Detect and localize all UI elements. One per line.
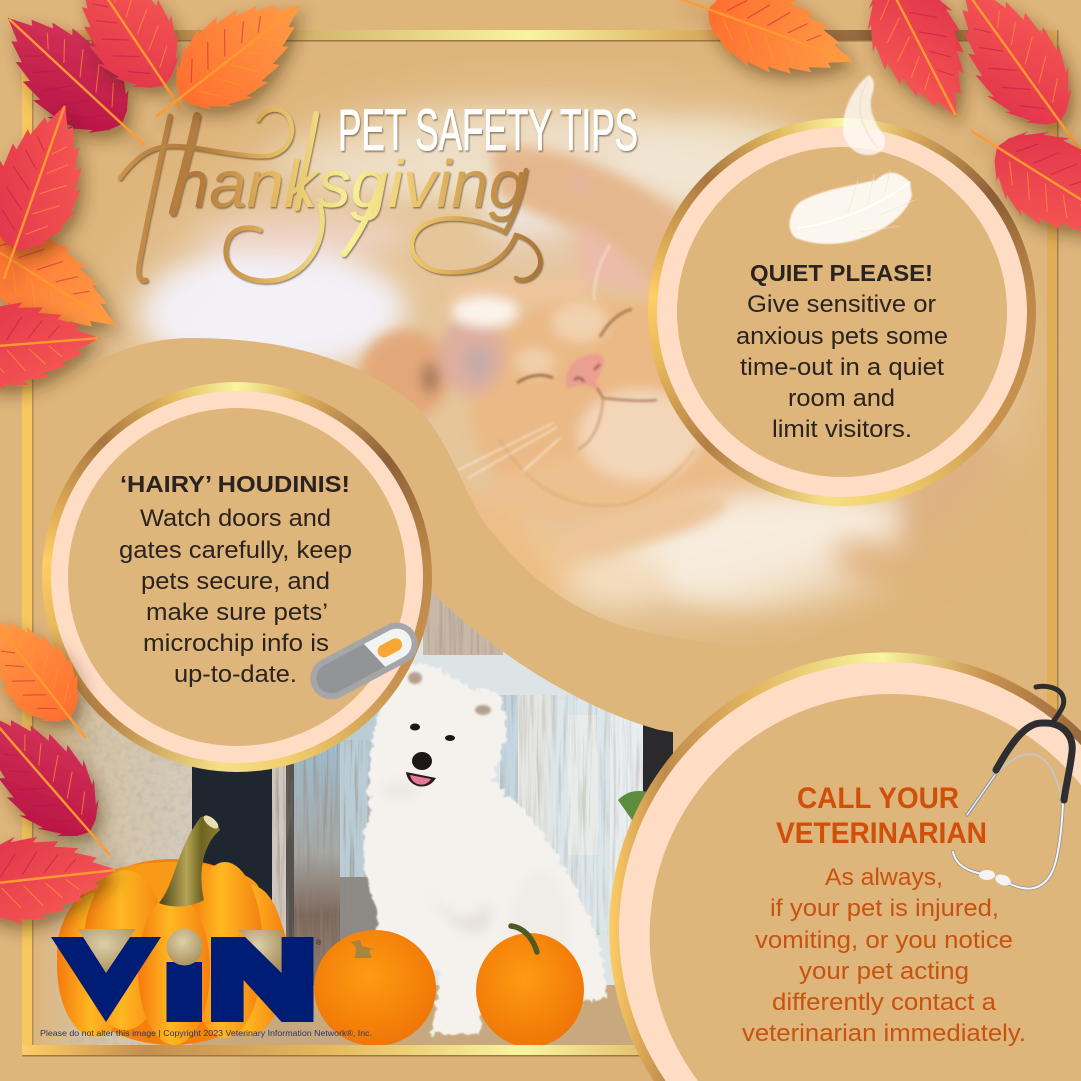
hairy houdinis text: microchip info is xyxy=(143,630,329,657)
small pumpkin right xyxy=(476,926,584,1047)
photo: sleeping orange cat xyxy=(92,74,1039,642)
veterinarian body text: differently contact a xyxy=(772,989,997,1016)
leaf: red top xyxy=(48,0,218,133)
tan swoosh divider xyxy=(10,338,1081,780)
large pumpkin xyxy=(57,813,287,1045)
veterinarian heading xyxy=(776,782,987,850)
copyright notice: Please do not alter this image | Copyright 2023 Veterinary Information Network®, Inc. xyxy=(40,1028,372,1038)
hairy houdinis text: Watch doors and xyxy=(140,505,331,532)
icon: microchip capsule xyxy=(303,615,425,707)
leaf: red top right xyxy=(832,0,997,137)
quiet please text xyxy=(736,260,948,443)
leaf: orange upper left side xyxy=(0,187,138,361)
photo: white dog with door and pumpkins xyxy=(32,590,673,1047)
leaf: red upper left side xyxy=(0,89,108,294)
leaf: orange top xyxy=(129,0,327,152)
leaf: red far top right xyxy=(926,0,1081,175)
veterinarian body text: As always, xyxy=(825,864,943,891)
icon: white feather upper xyxy=(843,75,885,155)
hairy houdinis text: make sure pets’ xyxy=(146,599,328,626)
leaf: orange lower left xyxy=(0,595,115,761)
panel: hairy houdinis xyxy=(42,382,432,772)
leaf: orange top right xyxy=(665,0,867,100)
leaf: crimson top left xyxy=(0,0,176,179)
door and wall background xyxy=(32,590,673,1047)
quiet please text: Give sensitive or xyxy=(747,291,936,318)
hairy houdinis text: gates carefully, keep xyxy=(119,537,352,564)
veterinarian body text: veterinarian immediately. xyxy=(742,1020,1026,1047)
veterinarian body text xyxy=(742,864,1026,1047)
small pumpkin left xyxy=(314,930,436,1046)
dog xyxy=(363,663,606,1034)
panel: quiet please xyxy=(648,118,1036,506)
veterinarian body text: vomiting, or you notice xyxy=(755,927,1013,954)
icon: white feather lower xyxy=(790,170,915,244)
panel: call your veterinarian xyxy=(609,652,1081,1081)
ground shadow below frame xyxy=(240,1055,660,1081)
hairy houdinis text xyxy=(119,471,352,688)
leaf: crimson lower left xyxy=(0,687,142,883)
logo: VIN: ® xyxy=(316,939,322,947)
title: Pet Safety Tips: PET SAFETY TIPS xyxy=(338,98,638,163)
quiet please text: QUIET PLEASE! xyxy=(750,260,933,286)
quiet please text: anxious pets some xyxy=(736,323,948,350)
veterinarian heading: VETERINARIAN xyxy=(776,817,987,850)
leaf: red lower left side xyxy=(0,294,103,396)
leaf: red bottom left xyxy=(0,826,122,934)
logo: VIN xyxy=(51,928,322,1022)
veterinarian heading: CALL YOUR xyxy=(797,782,959,815)
icon: stethoscope xyxy=(953,686,1072,889)
veterinarian body text: if your pet is injured, xyxy=(770,895,999,922)
title: Thanksgiving script: hanksgiving xyxy=(172,147,526,222)
hairy houdinis text: up-to-date. xyxy=(174,661,297,688)
veterinarian body text: your pet acting xyxy=(799,958,969,985)
title: Thanksgiving script xyxy=(120,110,540,281)
hairy houdinis text: ‘HAIRY’ HOUDINIS! xyxy=(120,471,350,497)
quiet please text: time-out in a quiet xyxy=(740,354,944,381)
leaf: red right edge xyxy=(947,92,1081,266)
quiet please text: limit visitors. xyxy=(772,416,912,443)
hairy houdinis text: pets secure, and xyxy=(141,568,330,595)
quiet please text: room and xyxy=(788,385,895,412)
